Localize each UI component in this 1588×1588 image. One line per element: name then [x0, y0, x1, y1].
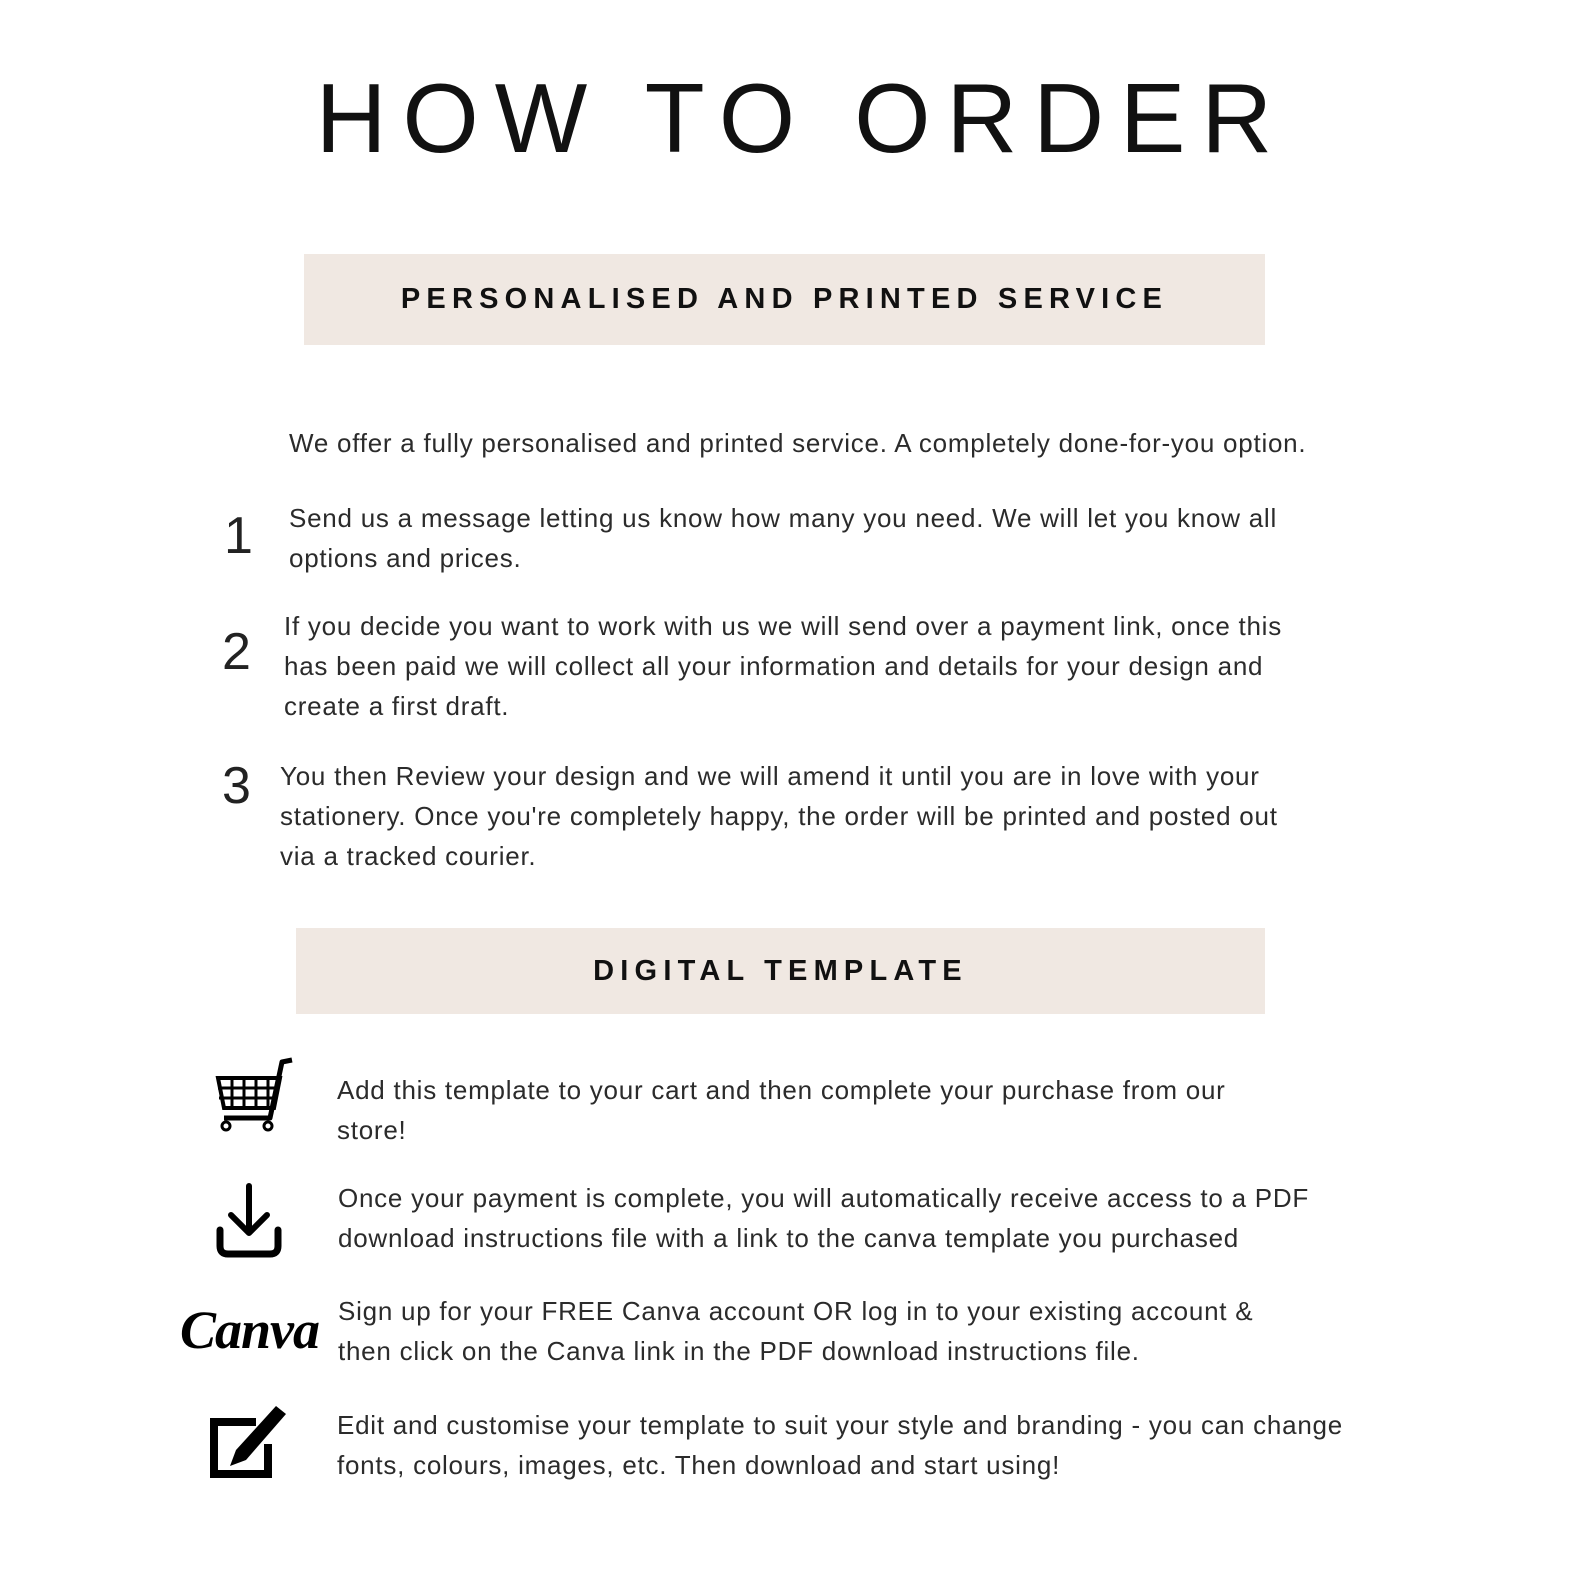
- cart text: [337, 1075, 1226, 1145]
- canva text: then click on the Canva link in the PDF download instructions file.: [338, 1336, 1140, 1366]
- heading band: personalised and printed service: [304, 254, 1265, 345]
- step 3 text: [280, 761, 1278, 871]
- cart text: store!: [337, 1115, 407, 1145]
- step 2: [222, 611, 1282, 721]
- number 1: 1: [224, 507, 253, 565]
- step 3: [222, 757, 1278, 871]
- download text: Once your payment is complete, you will automatically receive access to a PDF: [338, 1183, 1309, 1213]
- icon: cart: [216, 1058, 292, 1132]
- edit text: fonts, colours, images, etc. Then download and start using!: [337, 1450, 1060, 1480]
- step 2 text: If you decide you want to work with us we will send over a payment link, once this: [284, 611, 1282, 641]
- step 3 text: stationery. Once you're completely happy, the order will be printed and posted out: [280, 801, 1278, 831]
- edit text: Edit and customise your template to suit your style and branding - you can change: [337, 1410, 1343, 1440]
- number 2: 2: [222, 623, 251, 681]
- download text: [338, 1183, 1309, 1253]
- canva text: Sign up for your FREE Canva account OR log in to your existing account &: [338, 1296, 1253, 1326]
- step 1 text: options and prices.: [289, 543, 522, 573]
- step 3 text: You then Review your design and we will amend it until you are in love with your: [280, 761, 1260, 791]
- heading band: digital template: DIGITAL TEMPLATE: [593, 954, 968, 986]
- edit text: [337, 1410, 1343, 1480]
- heading band: digital template: [296, 928, 1265, 1014]
- intro text: We offer a fully personalised and printed service. A completely done-for-you option.: [289, 428, 1306, 458]
- step 1: [224, 503, 1277, 573]
- cart text: Add this template to your cart and then complete your purchase from our: [337, 1075, 1226, 1105]
- icon: edit: [210, 1406, 286, 1478]
- title: HOW TO ORDER: [316, 63, 1288, 173]
- icon: canva logo: Canva: [180, 1300, 319, 1360]
- heading band: personalised and printed service: PERSONALISED AND PRINTED SERVICE: [401, 283, 1168, 315]
- number 3: 3: [222, 757, 251, 815]
- icon: download: [216, 1183, 282, 1258]
- step 2 text: [284, 611, 1282, 721]
- step 1 text: Send us a message letting us know how many you need. We will let you know all: [289, 503, 1277, 533]
- canva text: [338, 1296, 1253, 1366]
- step 1 text: [289, 503, 1277, 573]
- step 2 text: has been paid we will collect all your information and details for your design and: [284, 651, 1263, 681]
- step 3 text: via a tracked courier.: [280, 841, 536, 871]
- step 2 text: create a first draft.: [284, 691, 509, 721]
- download text: download instructions file with a link to the canva template you purchased: [338, 1223, 1239, 1253]
